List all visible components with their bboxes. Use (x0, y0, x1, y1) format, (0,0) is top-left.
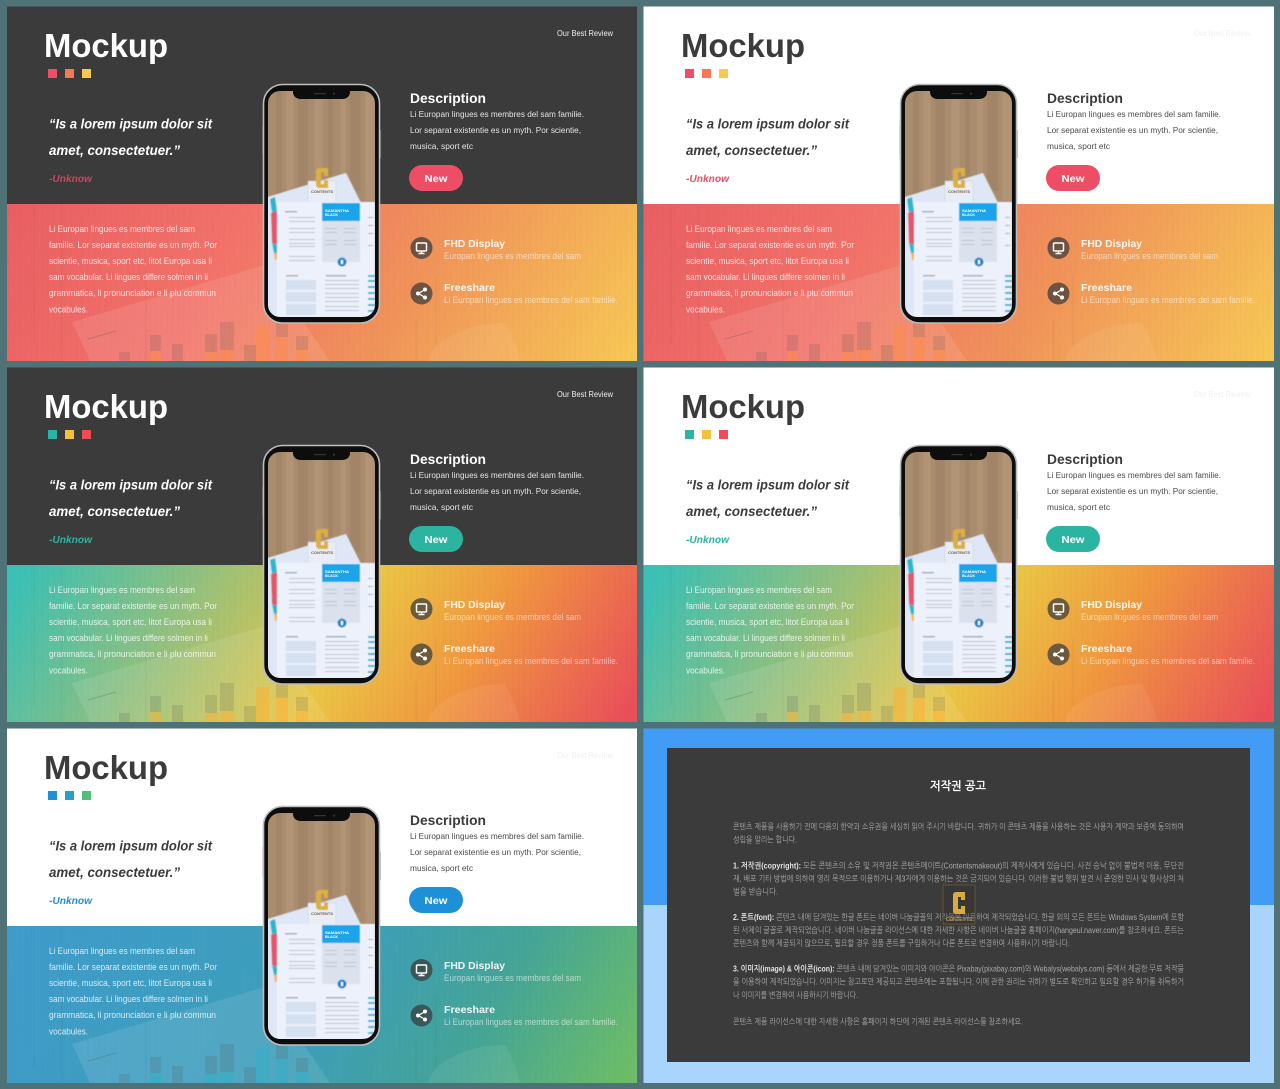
body paragraph (49, 946, 217, 1036)
feature: Freeshare: Freeshare (444, 643, 495, 655)
icon: share (1048, 644, 1070, 666)
body paragraph: vocabules. (686, 666, 725, 676)
slide 2: white coral (644, 6, 1274, 361)
body paragraph: scientie, musica, sport etc, litot Europa usa li (49, 617, 212, 627)
feature: FHD Display (444, 599, 581, 622)
phone mockup (900, 84, 1018, 323)
description text (410, 831, 584, 873)
body paragraph: Li Europan lingues es membres del sam (686, 224, 832, 234)
body paragraph: sam vocabular. Li lingues differe solmen in li (686, 272, 845, 282)
feature: Freeshare (1081, 282, 1255, 305)
body paragraph: Li Europan lingues es membres del sam (49, 946, 195, 956)
body paragraph: vocabules. (49, 666, 88, 676)
description text: Lor separat existentie es un myth. Por scientie, (1047, 486, 1218, 496)
feature: FHD Display (444, 960, 581, 983)
body paragraph: vocabules. (686, 304, 725, 314)
description text: musica, sport etc (410, 141, 474, 151)
body paragraph: familie. Lor separat existentie es un myth. Por (686, 601, 854, 611)
body paragraph (686, 585, 854, 676)
clause 3: image and icon (733, 964, 1184, 1000)
feature: FHD Display: Europan lingues es membres del sam (444, 251, 581, 261)
intro paragraph: 콘텐츠 제품을 사용하기 전에 다음의 한약과 소유권을 세심히 읽어 주시기 바랍니다. 귀하가 이 콘텐츠 제품을 사용하는 것은 사용자 계약과 보증에 동의하여 (733, 822, 1184, 832)
icon: monitor (1048, 598, 1070, 620)
phone mockup: SAMANTHA (325, 209, 350, 213)
phone mockup: SAMANTHA (962, 570, 987, 574)
feature: Freeshare (1081, 643, 1255, 666)
quote: amet, consectetuer.” (686, 503, 817, 519)
phone mockup: CONTENTS (311, 190, 333, 194)
description text (410, 109, 584, 151)
slide 5 gradient band with desk photo (7, 926, 637, 1083)
body paragraph (686, 224, 854, 314)
quote (686, 116, 850, 158)
clause 2: font: 2. 폰트(font): 콘텐츠 내에 담겨있는 한글 폰트는 네이버 나눔글꼴의 저작물을 이용하여 제작되었습니다. 한글 외의 모든 폰트는 Windows System에 포함 (733, 912, 1184, 922)
accent squares (685, 430, 728, 439)
icon: share (410, 1004, 432, 1026)
feature: Freeshare: Freeshare (444, 282, 495, 294)
feature: Freeshare (444, 643, 618, 666)
review label: Our Best Review (557, 29, 613, 38)
description heading: Description (410, 90, 486, 106)
title: Mockup (681, 388, 805, 425)
body paragraph: familie. Lor separat existentie es un myth. Por (49, 601, 217, 611)
new button (409, 165, 463, 191)
description text: Lor separat existentie es un myth. Por scientie, (410, 847, 581, 857)
clause 2: font (733, 912, 1184, 948)
quote: “Is a lorem ipsum dolor sit (49, 476, 213, 492)
dark notice panel (667, 748, 1250, 1062)
slide 2 gradient band with desk photo (644, 204, 1274, 361)
description text: Lor separat existentie es un myth. Por scientie, (1047, 125, 1218, 135)
title: Mockup (44, 749, 168, 786)
notice title: 저작권 공고 (930, 779, 987, 793)
new button: New (424, 173, 448, 185)
phone mockup: BLACK (325, 213, 339, 217)
body paragraph: scientie, musica, sport etc, litot Europa usa li (686, 256, 849, 266)
clause 3: image and icon: 나 이미지를 변경하여 사용하시기 바랍니다. (733, 990, 858, 1000)
phone mockup (262, 84, 381, 323)
feature: Freeshare: Freeshare (1081, 282, 1132, 294)
clause 3: image and icon: 3. 이미지(image) & 아이콘(icon): 콘텐츠 내에 담겨있는 이미지와 아이콘은 Pixabay(pixabay.com)와 Webalys(webalys.com) 등에서 제공한 무료 저작물 (733, 964, 1184, 974)
description text: Lor separat existentie es un myth. Por scientie, (410, 486, 581, 496)
phone mockup: CONTENTS (311, 912, 333, 916)
feature: Freeshare (444, 282, 618, 305)
quote: “Is a lorem ipsum dolor sit (686, 476, 850, 492)
quote author: -Unknow (686, 173, 730, 185)
review label: Our Best Review (1194, 29, 1250, 38)
watermark logo (943, 885, 975, 924)
body paragraph: sam vocabular. Li lingues differe solmen in li (686, 633, 845, 643)
phone mockup (900, 446, 1018, 684)
description text: musica, sport etc (1047, 502, 1111, 512)
new button: New (424, 534, 448, 546)
title: Mockup (44, 388, 168, 425)
accent squares (48, 69, 91, 78)
body paragraph: vocabules. (49, 1026, 88, 1036)
body paragraph: Li Europan lingues es membres del sam (49, 224, 195, 234)
clause 2: font: 된 서체의 글꼴로 제작되었습니다. 네이버 나눔글꼴 라이선스에 대한 자세한 사항은 네이버 나눔글꼴 홈페이지(hangeul.naver.com)를 참조하세요. 폰트는 (733, 925, 1184, 935)
quote: amet, consectetuer.” (49, 864, 180, 880)
body paragraph (49, 224, 217, 314)
blue background (644, 728, 1274, 1083)
intro paragraph (733, 822, 1184, 844)
new button: New (1062, 173, 1085, 185)
description heading: Description (410, 451, 486, 467)
body paragraph: grammatica, li pronunciation e li plu commun (49, 288, 216, 298)
description text: Li Europan lingues es membres del sam familie. (1047, 470, 1221, 480)
feature: FHD Display: FHD Display (444, 599, 505, 611)
description text: musica, sport etc (410, 502, 474, 512)
clause 2: font: 콘텐츠와 함께 제공되지 않으므로, 필요할 경우 정품 폰트를 구입하거나 다른 폰트로 변경하여 사용하시기 바랍니다. (733, 938, 1070, 948)
feature: FHD Display (1081, 238, 1218, 261)
feature: Freeshare: Li Europan lingues es membres del sam familie. (444, 295, 618, 305)
feature: FHD Display: FHD Display (1081, 599, 1142, 611)
icon: share (410, 282, 432, 304)
phone mockup (262, 806, 381, 1045)
slide 5 upper panel (7, 728, 637, 926)
quote author: -Unknow (49, 534, 93, 546)
description text: Lor separat existentie es un myth. Por scientie, (410, 125, 581, 135)
feature: FHD Display: FHD Display (444, 960, 505, 972)
body paragraph: grammatica, li pronunciation e li plu commun (49, 1010, 216, 1020)
feature: Freeshare: Freeshare (1081, 643, 1132, 655)
feature: FHD Display: Europan lingues es membres del sam (1081, 251, 1218, 261)
quote (686, 476, 850, 519)
watermark logo: CONTENTS (946, 917, 973, 923)
feature: FHD Display: Europan lingues es membres del sam (444, 612, 581, 622)
body paragraph: vocabules. (49, 304, 88, 314)
description heading: Description (410, 812, 486, 828)
body paragraph: familie. Lor separat existentie es un myth. Por (49, 240, 217, 250)
phone mockup: CONTENTS (948, 551, 970, 555)
accent squares (685, 69, 728, 78)
accent squares (48, 791, 91, 800)
icon: monitor (410, 237, 432, 259)
new button (1046, 165, 1100, 191)
body paragraph: familie. Lor separat existentie es un myth. Por (686, 240, 854, 250)
phone mockup: CONTENTS (948, 190, 970, 194)
body paragraph: scientie, musica, sport etc, litot Europa usa li (49, 256, 212, 266)
phone mockup: SAMANTHA (325, 931, 350, 935)
slide 1 gradient band with desk photo (7, 204, 637, 361)
quote (49, 838, 213, 880)
slide 1 upper panel (7, 6, 637, 204)
body paragraph (49, 585, 217, 676)
phone mockup (262, 446, 381, 684)
body paragraph: scientie, musica, sport etc, litot Europa usa li (686, 617, 849, 627)
feature: FHD Display: Europan lingues es membres del sam (444, 973, 581, 983)
intro paragraph: 성립을 알리는 합니다. (733, 834, 797, 844)
description text: Li Europan lingues es membres del sam familie. (410, 831, 584, 841)
feature: Freeshare: Li Europan lingues es membres del sam familie. (444, 1017, 618, 1027)
title: Mockup (681, 27, 805, 64)
slide 4 upper panel (644, 368, 1274, 566)
phone mockup: BLACK (325, 574, 339, 578)
description text: Li Europan lingues es membres del sam familie. (1047, 109, 1221, 119)
new button: New (424, 895, 448, 907)
title: Mockup (44, 27, 168, 64)
description text (410, 470, 584, 512)
icon: monitor (1048, 237, 1070, 259)
slide 6: copyright notice (644, 728, 1274, 1083)
feature: Freeshare: Li Europan lingues es membres del sam familie. (1081, 295, 1255, 305)
clause 1: copyright: 1. 저작권(copyright): 모든 콘텐츠의 소유 및 저작권은 콘텐츠메이트(Contentsmakeout)의 제작사에게 있습니다. 사전 승낙 없이 불법적 이용, 무단전 (733, 860, 1184, 870)
body paragraph: sam vocabular. Li lingues differe solmen in li (49, 633, 208, 643)
review label: Our Best Review (557, 751, 613, 760)
accent squares (48, 430, 91, 439)
clause 1: copyright: 벌을 받습니다. (733, 886, 778, 896)
feature: Freeshare: Freeshare (444, 1004, 495, 1016)
icon: monitor (410, 598, 432, 620)
phone mockup: BLACK (962, 574, 976, 578)
slide 5: white blue (7, 728, 637, 1083)
quote: amet, consectetuer.” (686, 142, 817, 158)
new button (1046, 526, 1100, 552)
quote (49, 476, 213, 519)
feature: FHD Display: Europan lingues es membres del sam (1081, 612, 1218, 622)
new button (409, 526, 463, 552)
body paragraph: Li Europan lingues es membres del sam (49, 585, 195, 595)
icon: monitor (410, 959, 432, 981)
description text: musica, sport etc (1047, 141, 1111, 151)
closing line: 콘텐츠 제품 라이선스에 대한 자세한 사항은 홈페이지 하단에 기재된 콘텐츠 라이선스를 참조하세요. (733, 1016, 1023, 1026)
phone mockup: BLACK (325, 935, 339, 939)
quote author: -Unknow (49, 895, 93, 907)
feature: Freeshare (444, 1004, 618, 1027)
body paragraph: sam vocabular. Li lingues differe solmen in li (49, 994, 208, 1004)
review label: Our Best Review (557, 390, 613, 399)
feature: Freeshare: Li Europan lingues es membres del sam familie. (444, 656, 618, 666)
quote: amet, consectetuer.” (49, 142, 180, 158)
feature: FHD Display: FHD Display (1081, 238, 1142, 250)
icon: share (410, 644, 432, 666)
quote: amet, consectetuer.” (49, 503, 180, 519)
feature: FHD Display: FHD Display (444, 238, 505, 250)
feature: FHD Display (1081, 599, 1218, 622)
body paragraph: grammatica, li pronunciation e li plu commun (686, 288, 853, 298)
icon: share (1048, 282, 1070, 304)
body paragraph: grammatica, li pronunciation e li plu commun (686, 649, 853, 659)
quote: “Is a lorem ipsum dolor sit (686, 116, 850, 132)
description text: Li Europan lingues es membres del sam familie. (410, 109, 584, 119)
review label: Our Best Review (1194, 390, 1250, 399)
slide 3 upper panel (7, 368, 637, 566)
body paragraph: scientie, musica, sport etc, litot Europa usa li (49, 978, 212, 988)
body paragraph: familie. Lor separat existentie es un myth. Por (49, 962, 217, 972)
clause 1: copyright (733, 860, 1184, 896)
feature: FHD Display (444, 238, 581, 261)
body paragraph: grammatica, li pronunciation e li plu commun (49, 649, 216, 659)
description heading: Description (1047, 90, 1123, 106)
new button: New (1062, 534, 1085, 546)
new button (409, 887, 463, 913)
phone mockup: BLACK (962, 213, 976, 217)
slide 2 upper panel (644, 6, 1274, 204)
description text (1047, 470, 1221, 512)
description text (1047, 109, 1221, 151)
slide 4: white teal (644, 368, 1274, 722)
slide 1: dark coral (7, 6, 637, 361)
quote: “Is a lorem ipsum dolor sit (49, 116, 213, 132)
body paragraph: Li Europan lingues es membres del sam (686, 585, 832, 595)
phone mockup: CONTENTS (311, 551, 333, 555)
description text: Li Europan lingues es membres del sam familie. (410, 470, 584, 480)
phone mockup: SAMANTHA (962, 209, 987, 213)
slide 4 gradient band with desk photo (644, 565, 1274, 722)
phone mockup: SAMANTHA (325, 570, 350, 574)
slide 3 gradient band with desk photo (7, 565, 637, 722)
quote author: -Unknow (686, 534, 730, 546)
slide 3: dark teal (7, 368, 637, 722)
quote (49, 116, 213, 158)
clause 3: image and icon: 을 이용하여 제작되었습니다. 이미지는 참고로만 제공되고 콘텐츠에는 포함됩니다. 이에 관한 권리는 귀하가 별도로 확인하고 필요할 경우 허가를 취득하거 (733, 976, 1184, 986)
clause 1: copyright: 재, 배포 기타 방법에 의하여 영리 목적으로 이용하거나 제3자에게 이용하는 것은 금지되어 있습니다. 이러한 불법 행위 발견 시 준엄한 민사 및 형사상의 처 (733, 874, 1184, 884)
description heading: Description (1047, 451, 1123, 467)
quote author: -Unknow (49, 173, 93, 185)
feature: Freeshare: Li Europan lingues es membres del sam familie. (1081, 656, 1255, 666)
description text: musica, sport etc (410, 863, 474, 873)
quote: “Is a lorem ipsum dolor sit (49, 838, 213, 854)
body paragraph: sam vocabular. Li lingues differe solmen in li (49, 272, 208, 282)
